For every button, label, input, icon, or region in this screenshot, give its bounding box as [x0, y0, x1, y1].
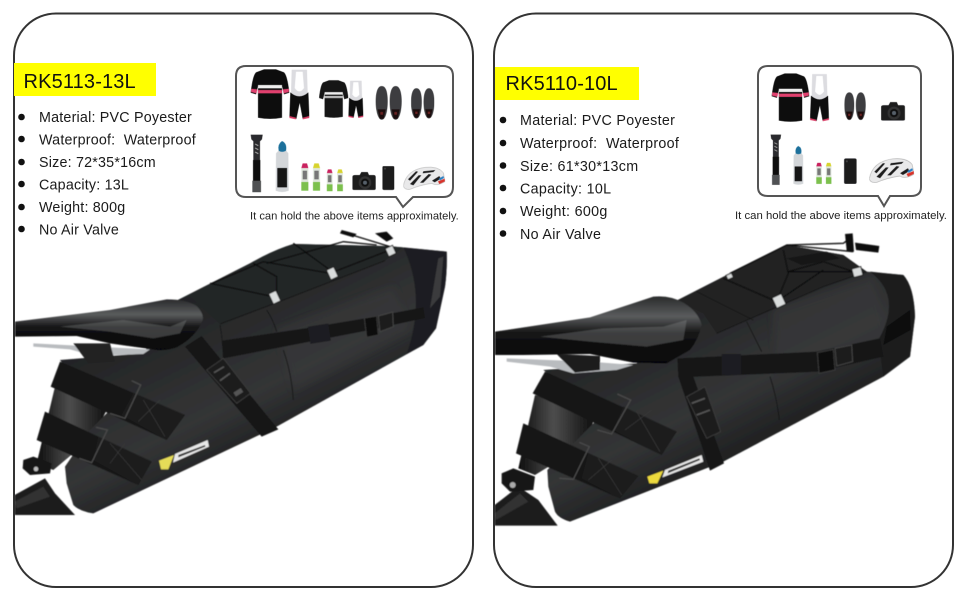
- spec list: Size: 72*35*16cm: [39, 155, 156, 171]
- spec list: Waterproof: Waterproof: [39, 132, 196, 148]
- bungee cords: [210, 233, 390, 297]
- seatpost and frame: [495, 395, 597, 526]
- bag body: [60, 244, 447, 513]
- bag photo: RK5113-13L on saddle: [15, 230, 447, 515]
- top panel: [177, 244, 403, 324]
- spec list: [18, 110, 196, 238]
- bungee cords: [723, 238, 857, 302]
- saddle: [15, 299, 203, 350]
- reflective clips: [726, 267, 863, 308]
- spec list: Weight: 800g: [39, 200, 125, 216]
- bag body: [543, 245, 915, 522]
- heading: RK5110-10L: [495, 67, 639, 100]
- horizontal strap: [677, 338, 883, 377]
- spec list: Size: 61*30*13cm: [520, 159, 638, 175]
- spec list: Material: PVC Poyester: [520, 113, 675, 129]
- caption: It can hold the above items approximately.: [735, 210, 947, 222]
- spec list: Capacity: 10L: [520, 182, 611, 198]
- velcro strap upper: [51, 362, 185, 440]
- diagonal strap with buckle: [185, 336, 278, 437]
- caption: It can hold the above items approximately.: [250, 210, 459, 222]
- callout: items it can hold: [236, 66, 453, 207]
- spec list: Material: PVC Poyester: [39, 110, 192, 126]
- saddle highlight: [540, 320, 687, 347]
- seatpost and frame: [15, 387, 110, 515]
- body sheen: [773, 277, 890, 370]
- velcro strap upper: [533, 372, 677, 455]
- brand label: [647, 455, 703, 483]
- spec list: No Air Valve: [520, 227, 601, 243]
- cord lock: [340, 230, 393, 242]
- saddle rails: [33, 343, 150, 363]
- seams: [220, 261, 385, 400]
- bag photo: RK5110-10L on saddle: [495, 233, 915, 526]
- saddle: [495, 296, 702, 363]
- heading: RK5113-13L: RK5113-13L: [24, 71, 136, 93]
- spec list: Waterproof: Waterproof: [520, 136, 679, 152]
- vent panel: [787, 252, 840, 265]
- icons: cycling gear: [251, 69, 445, 192]
- panel: RK5113-13L: [14, 14, 473, 587]
- horizontal strap: [222, 307, 425, 358]
- spec list: No Air Valve: [39, 222, 119, 238]
- velcro strap lower: [516, 423, 638, 498]
- saddle rails: [507, 354, 633, 373]
- heading: RK5110-10L: RK5110-10L: [506, 73, 618, 95]
- velcro strap lower: [37, 412, 152, 485]
- reflective clips: [269, 245, 396, 304]
- heading: RK5113-13L: [14, 63, 156, 96]
- diagonal strap with buckle: [678, 377, 724, 471]
- spec list: [500, 113, 679, 243]
- seams: [697, 272, 867, 420]
- brand label: [159, 440, 209, 469]
- body sheen: [277, 287, 410, 390]
- spec list: Weight: 600g: [520, 204, 608, 220]
- panel: RK5110-10L: [494, 14, 953, 587]
- roll-top end: [870, 272, 915, 377]
- spec list: Capacity: 13L: [39, 178, 129, 194]
- top panel: [677, 245, 867, 333]
- saddle highlight: [60, 320, 187, 338]
- icons: cycling gear: [771, 73, 914, 185]
- callout: items it can hold: [758, 66, 921, 206]
- roll-top end: [403, 247, 447, 354]
- cord lock: [845, 233, 879, 253]
